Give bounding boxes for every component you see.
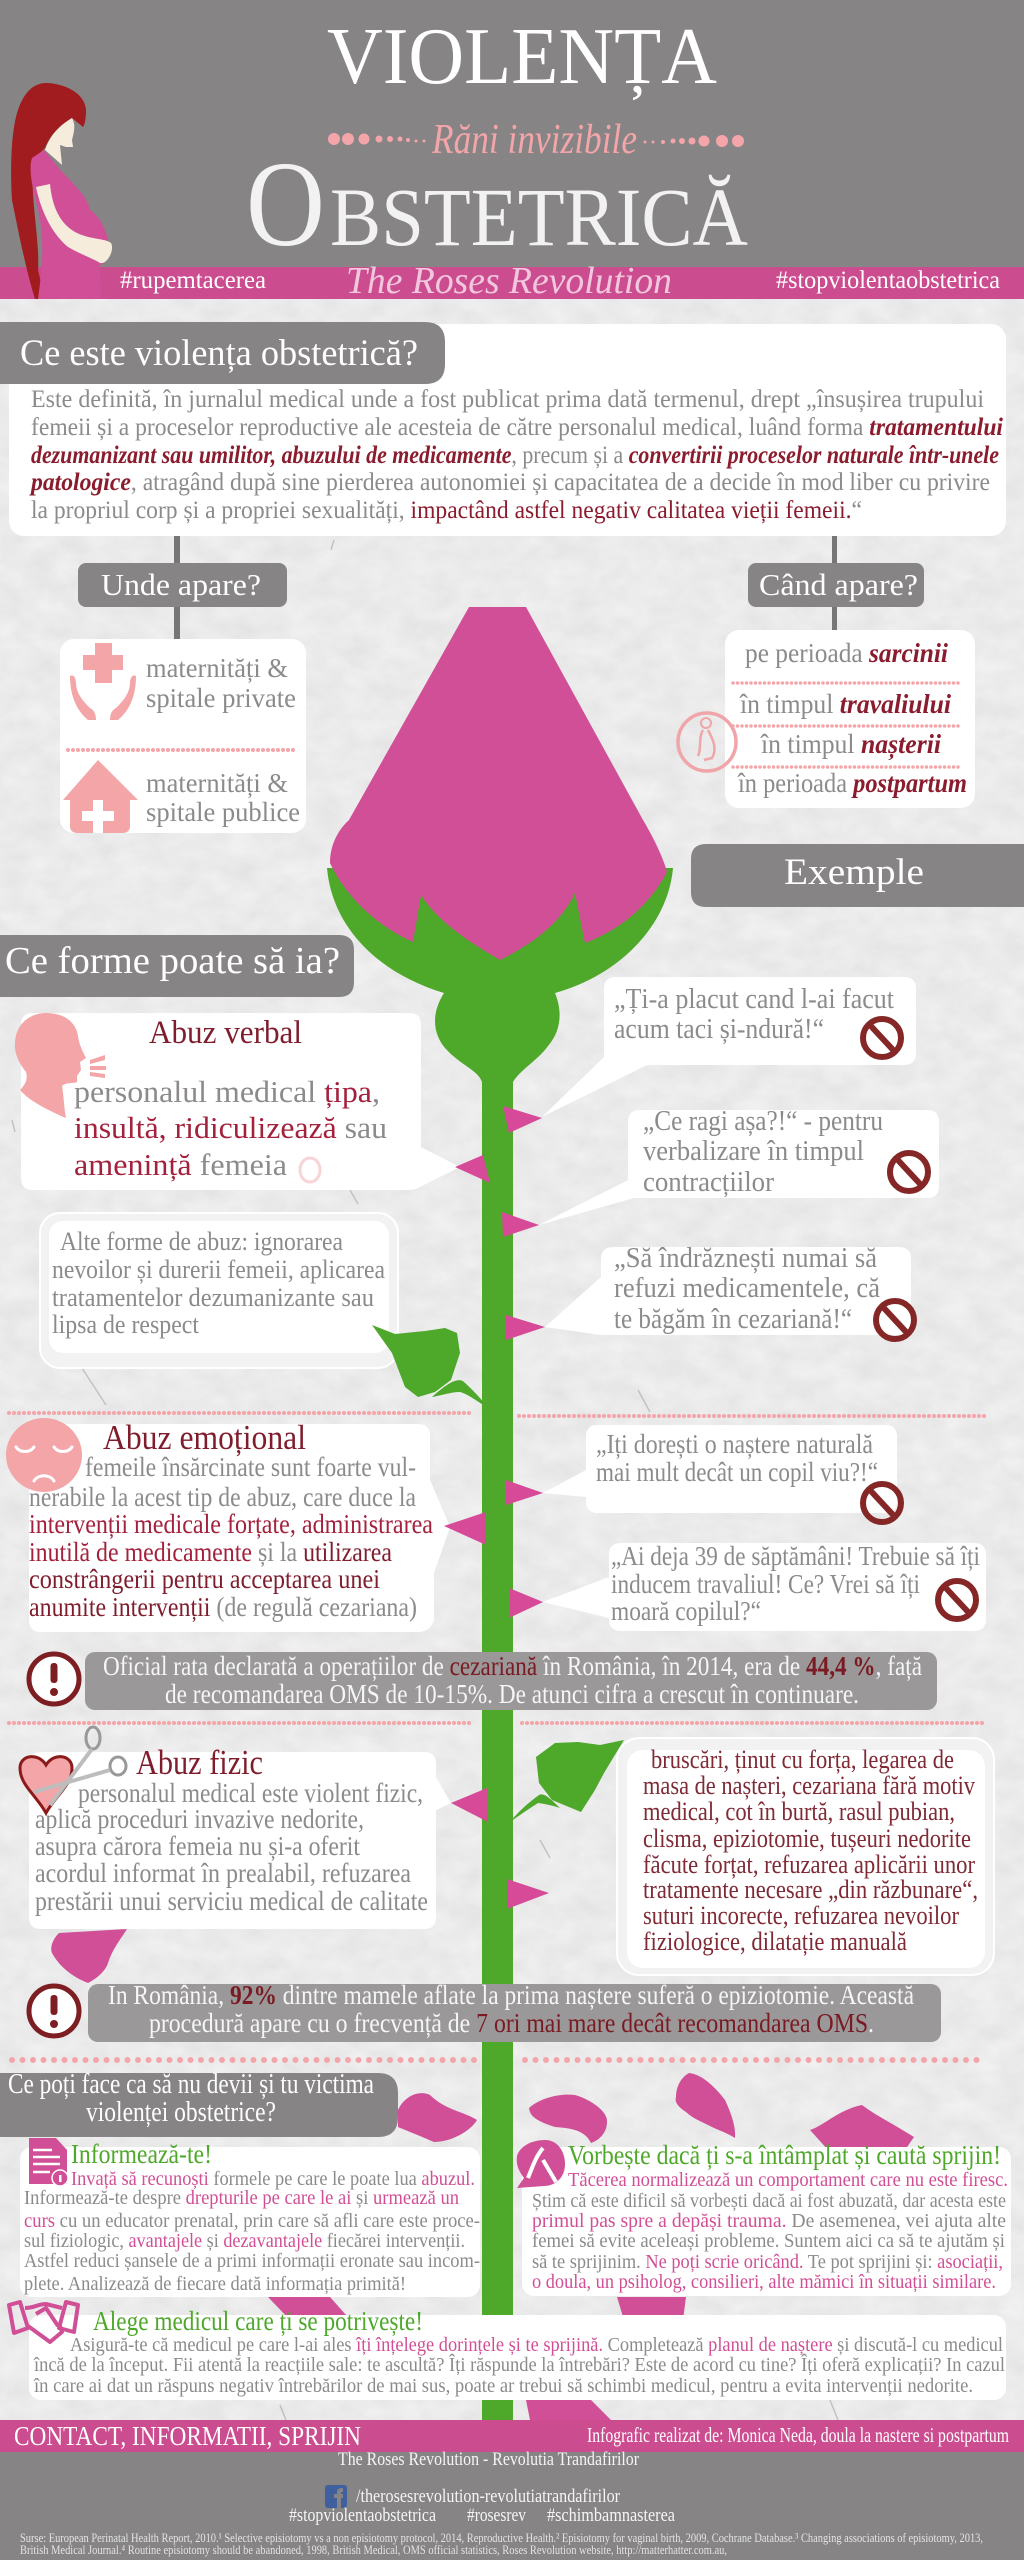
panel: physical abuse: personalul medical este violent fizic, <box>78 1778 423 1808</box>
petals: falling <box>268 2073 914 2420</box>
petal: falling left <box>51 1929 127 1983</box>
icon: heart and scissors <box>20 1727 126 1813</box>
panel: physical abuse: acordul informat în prealabil, refuzarea <box>35 1858 411 1888</box>
footer: contact and sources: #stopviolentaobstetrica <box>289 2505 436 2526</box>
header background <box>0 0 1024 267</box>
footer banner: CONTACT, INFORMATII, SPRIJIN <box>14 2421 361 2451</box>
thorn: example 2 <box>502 1212 539 1237</box>
panel: physical abuse <box>20 1727 451 1929</box>
pink banner: #rupemtacerea <box>120 267 266 294</box>
thorn: example 5 <box>509 1588 543 1618</box>
panel: physical abuse: prestării unui serviciu medical de calitate <box>35 1886 428 1916</box>
title: Obstetrică <box>246 137 748 272</box>
panel: speak up <box>517 2140 1011 2296</box>
callout: example 3: refuzi medicamentele, că <box>614 1273 881 1304</box>
panel: other forms of abuse: tratamentelor dezumanizante sau <box>52 1283 374 1312</box>
panel: inform yourself: curs cu un educator prenatal, prin care să afli care este proce- <box>24 2210 480 2232</box>
footer: contact and sources <box>0 2449 1024 2560</box>
panel: physical abuse examples <box>617 1738 994 1975</box>
heading: Când apare: Când apare? <box>759 567 918 602</box>
panel: when: pe perioada sarcinii <box>745 638 948 668</box>
thorn: verbal abuse <box>455 1155 490 1183</box>
definition text: dezumanizant sau umilitor, abuzului de medicamente, precum și a convertirii proceselor naturale într-unele <box>31 442 999 469</box>
panel: emotional abuse: inutilă de medicamente și la utilizarea <box>29 1537 392 1567</box>
icon: sad face <box>6 1418 82 1492</box>
callout: example 5: moară copilul?“ <box>611 1596 761 1626</box>
panel: inform yourself: plete. Analizează de fiecare dată informația primită! <box>24 2273 406 2295</box>
panel: choose your doctor <box>9 2302 1006 2400</box>
thorn: emotional abuse <box>444 1512 486 1545</box>
callout: example 1: „Ți-a placut cand l-ai facut <box>614 984 894 1015</box>
panel: inform yourself: Astfel reduci șansele de a primi informații eronate sau incom- <box>24 2250 480 2272</box>
footer: contact and sources: #schimbamnasterea <box>547 2505 675 2526</box>
panel: when: în timpul nașterii <box>760 729 941 760</box>
panel: emotional abuse: anumite intervenții (de regulă cezariana) <box>29 1592 417 1622</box>
icon: exclamation <box>29 1986 79 2036</box>
panel: physical abuse examples: făcute forțat, refuzarea aplicării unor <box>643 1850 975 1879</box>
panel: inform yourself: Informează-te despre drepturile pe care le ai și urmează un <box>24 2187 459 2209</box>
heading: what can you do <box>0 2069 398 2137</box>
thorn: physical abuse left <box>451 1788 488 1822</box>
callout: example 5: inducem travaliul! Ce? Vrei să îți <box>611 1569 920 1599</box>
thorn: example 1 <box>503 1106 542 1133</box>
heading: Ce este violența obstetrică: Ce este violența obstetrică? <box>20 333 418 374</box>
panel: emotional abuse: nerabile la acest tip de abuz, care duce la <box>29 1482 416 1512</box>
text: public hospitals <box>146 768 300 827</box>
footer: contact and sources: /therosesrevolution-revolutiatrandafirilor <box>356 2486 621 2507</box>
panel: inform yourself: Informează-te! <box>71 2139 212 2169</box>
leaf: left <box>372 1325 488 1408</box>
definition text <box>29 386 1003 524</box>
definition text: femeii și a proceselor reproductive ale acesteia de către personalul medical, luând forma tratamentului <box>31 414 1003 441</box>
panel: physical abuse examples: masa de nașteri, cezariana fără motiv <box>643 1771 975 1800</box>
panel: emotional abuse: intervenții medicale forțate, administrarea <box>29 1509 433 1539</box>
icon: hands with cross <box>70 643 136 720</box>
callout: example 2 <box>539 1106 939 1225</box>
panel: choose your doctor: în care ai dat un răspuns negativ întrebărilor de mai sus, poate ar trebui să schimbi medicul, pentru a evita intervenții nedorite. <box>33 2375 973 2397</box>
illustration: pregnant woman <box>11 83 112 299</box>
footer: contact and sources: #rosesrev <box>467 2505 526 2526</box>
stem <box>482 1075 513 2420</box>
heading: Ce forme poate să ia: Ce forme poate să ia? <box>5 940 340 982</box>
pink banner <box>0 260 1024 302</box>
panel: speak up: să te sprijinim. Ne poți scrie oricând. Te pot sprijini și: asociații, <box>532 2251 1003 2273</box>
panel: where <box>60 639 306 833</box>
definition text: la propriul corp și a propriei sexualități, impactând astfel negativ calitatea vieții femeii.“ <box>31 497 862 524</box>
callout: example 4 <box>543 1425 901 1522</box>
heading: Unde apare: Unde apare? <box>101 567 261 602</box>
panel: physical abuse examples: suturi incorecte, refuzarea nevoilor <box>643 1901 959 1930</box>
heading: Când apare <box>748 563 924 607</box>
thorn: example 4 <box>506 1480 543 1505</box>
panel: verbal abuse: personalul medical țipa, <box>74 1074 380 1109</box>
panel: other forms of abuse: Alte forme de abuz: ignorarea <box>60 1227 343 1256</box>
panel: when: în timpul travaliului <box>739 689 951 719</box>
footer: contact and sources: British Medical Journal.⁴ Routine episiotomy should be abandoned, 1998, British Medical, OMS official statistics, Roses Revolution website, http://matterhatter.com.au, <box>20 2542 727 2557</box>
footer: contact and sources: The Roses Revolution - Revolutia Trandafirilor <box>338 2449 640 2470</box>
footer banner <box>0 2420 1024 2452</box>
heading: Ce este violența obstetrică <box>0 322 445 384</box>
panel: physical abuse: asupra cărora femeia nu și-a oferit <box>35 1831 360 1861</box>
sepals and hip <box>327 868 673 1082</box>
definition text: Este definită, în jurnalul medical unde a fost publicat prima dată termenul, drept „însușirea trupului <box>31 386 984 413</box>
icon: document <box>29 2138 68 2186</box>
callout: example 2: „Ce ragi așa?!“ - pentru <box>643 1106 883 1137</box>
panel: definition <box>0 322 1006 536</box>
callout: example 5 <box>543 1541 986 1631</box>
thorn: example 3 <box>506 1315 545 1340</box>
panel: physical abuse examples: bruscări, ținut cu forța, legarea de <box>651 1745 954 1774</box>
text: public hospitals: spitale publice <box>146 797 300 827</box>
callout: example 1 <box>542 977 916 1117</box>
panel: physical abuse examples: fiziologice, dilatație manuală <box>643 1927 907 1956</box>
alert: caesarean rate: Oficial rata declarată a operațiilor de cezariană în România, în 2014, era de 44,4 %, față <box>103 1651 922 1681</box>
alert: episiotomy: procedură apare cu o frecvență de 7 ori mai mare decât recomandarea OMS. <box>149 2008 874 2038</box>
panel: when <box>678 630 975 808</box>
icon: prohibited <box>890 1153 928 1191</box>
rose <box>327 607 673 2420</box>
text: private hospitals: spitale private <box>146 683 296 713</box>
alert: caesarean rate: de recomandarea OMS de 10-15%. De atunci cifra a crescut în continuare. <box>165 1679 859 1709</box>
panel: verbal abuse: Abuz verbal <box>149 1015 302 1051</box>
panel: speak up: femei să evite aceleași probleme. Suntem aici ca să te ajutăm și <box>532 2230 1005 2252</box>
heading: Unde apare <box>78 563 287 607</box>
definition text: patologice, atragând după sine pierderea autonomiei și capacitatea de a decide în mod liber cu privire <box>29 469 990 496</box>
callout: example 3: „Să îndrăznești numai să <box>614 1243 878 1274</box>
heading: Exemple <box>691 844 1024 907</box>
panel: other forms of abuse: lipsa de respect <box>52 1310 200 1339</box>
subtitle with dotted ornaments <box>328 117 744 163</box>
panel: inform yourself: sul fiziologic, avantajele și dezavantajele fiecărei intervenții. <box>24 2230 465 2252</box>
panel: when: în perioada postpartum <box>737 768 967 798</box>
panel: choose your doctor: Asigură-te că medicul pe care l-ai ales îți înțelege dorințele și te sprijină. Completează planul de naștere și discută-l cu medicul <box>70 2334 1003 2356</box>
icon: prohibited <box>863 1019 901 1057</box>
icon: handshake <box>9 2302 78 2342</box>
callout: example 3 <box>545 1243 914 1339</box>
panel: inform yourself: Invață să recunoști formele pe care le poate lua abuzul. <box>71 2168 475 2190</box>
panel: other forms of abuse: nevoilor și durerii femeii, aplicarea <box>52 1255 385 1284</box>
connector lines <box>174 536 837 640</box>
panel: physical abuse examples: medical, cot în burtă, rasul pubian, <box>643 1797 955 1826</box>
icon: prohibited <box>863 1484 901 1522</box>
text: private hospitals: maternități & <box>146 653 288 683</box>
alert: episiotomy: In România, 92% dintre mamele aflate la prima naștere suferă o epiziotomie. Această <box>108 1980 914 2010</box>
panel: speak up: primul pas spre a depăși trauma. De asemenea, vei ajuta alte <box>532 2210 1006 2232</box>
heading: Ce forme poate să ia <box>0 935 354 997</box>
thorn: physical abuse right <box>507 1879 549 1909</box>
panel: verbal abuse: amenință femeia <box>74 1147 287 1182</box>
heading: what can you do: violenței obstetrice? <box>86 2097 276 2128</box>
icon: hospital house <box>63 760 138 833</box>
leaf: right <box>510 1740 624 1822</box>
panel: verbal abuse <box>15 1013 460 1190</box>
pink banner: The Roses Revolution <box>346 260 672 302</box>
title: Violența: VIOLENȚA <box>327 13 717 101</box>
icon: exclamation <box>29 1654 79 1704</box>
panel: other forms of abuse <box>40 1213 398 1368</box>
icon: prohibited <box>876 1301 914 1339</box>
panel: inform yourself <box>20 2138 480 2297</box>
icon: speech bubble with figure <box>517 2140 565 2188</box>
heading: what can you do: Ce poți face ca să nu devii și tu victima <box>8 2069 374 2100</box>
bud <box>330 607 667 960</box>
panel: emotional abuse <box>6 1418 450 1632</box>
panel: emotional abuse: Abuz emoțional <box>103 1418 306 1457</box>
panel: emotional abuse: femeile însărcinate sunt foarte vul- <box>85 1452 416 1482</box>
text: private hospitals <box>146 653 296 713</box>
icon: prohibited <box>938 1581 976 1619</box>
panel: physical abuse examples: tratamente necesare „din răzbunare“, <box>643 1875 978 1904</box>
callout: example 2: contracțiilor <box>643 1167 775 1198</box>
icon: labouring woman in circle <box>678 713 736 771</box>
callout: example 4: „Iți dorești o naștere naturală <box>596 1429 873 1459</box>
callout: example 4: mai mult decât un copil viu?!“ <box>596 1457 878 1487</box>
panel: emotional abuse: constrângerii pentru acceptarea unei <box>29 1564 380 1594</box>
panel: physical abuse: aplică proceduri invazive nedorite, <box>35 1804 364 1834</box>
icon: facebook <box>325 2485 347 2508</box>
pink banner: #stopviolentaobstetrica <box>776 267 1000 294</box>
text: public hospitals: maternități & <box>146 768 288 798</box>
title: Obstetrică: BSTETRICĂ <box>330 171 748 263</box>
panel: physical abuse: Abuz fizic <box>136 1743 263 1782</box>
title: Obstetrică: O <box>246 137 325 272</box>
alert: caesarean rate <box>29 1651 937 1710</box>
panel: speak up: o doula, un psiholog, consilieri, alte mămici în situații similare. <box>532 2271 996 2293</box>
panel: verbal abuse: insultă, ridiculizează sau <box>74 1110 387 1145</box>
alert: episiotomy <box>29 1980 941 2042</box>
icon: shouting head <box>15 1013 106 1118</box>
callout: example 1: acum taci și-ndură!“ <box>614 1014 824 1045</box>
callout: example 2: verbalizare în timpul <box>643 1136 864 1167</box>
subtitle with dotted ornaments: Răni invizibile <box>431 117 637 163</box>
panel: choose your doctor: Alege medicul care ți se potrivește! <box>93 2306 423 2336</box>
panel: physical abuse examples: clisma, epiziotomie, tușeuri nedorite <box>643 1824 971 1853</box>
heading: Exemple: Exemple <box>784 852 924 893</box>
callout: example 3: te băgăm în cezariană!“ <box>614 1304 852 1335</box>
